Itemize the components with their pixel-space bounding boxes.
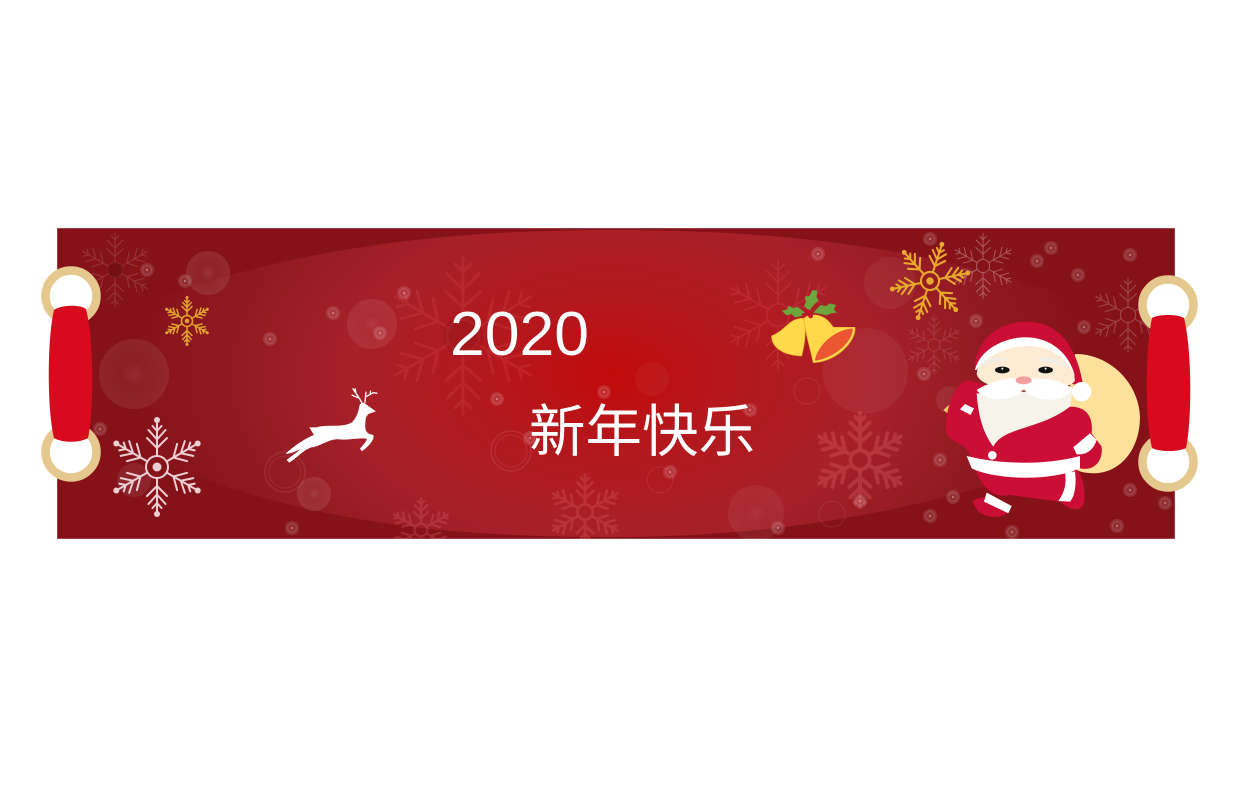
santa trim xyxy=(960,404,1097,513)
santa sack strap xyxy=(943,404,950,414)
santa hat xyxy=(975,322,1083,387)
banner background xyxy=(57,228,1175,561)
snowflake: white lower left xyxy=(109,417,205,517)
right red roll xyxy=(1147,315,1190,451)
icon: santa claus with sack xyxy=(943,322,1140,517)
santa face xyxy=(977,342,1075,390)
bokeh circles xyxy=(93,232,1172,541)
right top ring xyxy=(1142,280,1194,330)
title: 新年快乐: 新年快乐 xyxy=(529,400,755,463)
santa hat band xyxy=(975,337,1075,377)
title: 2020: 2020 xyxy=(450,300,589,369)
left top ring xyxy=(46,270,96,322)
snowflake: gold upper right xyxy=(890,242,970,320)
banner illustration xyxy=(41,228,1198,539)
icon: leaping reindeer xyxy=(286,388,377,463)
left red roll xyxy=(49,306,92,442)
santa eyes xyxy=(995,367,1010,373)
santa left foot xyxy=(972,497,1012,517)
left bottom ring xyxy=(46,426,96,478)
right scroll handle xyxy=(1142,280,1194,488)
santa moustache xyxy=(977,378,1073,400)
left scroll handle xyxy=(46,270,96,478)
icon: christmas bells xyxy=(772,290,855,363)
santa eyebrows xyxy=(979,358,1068,368)
santa nose xyxy=(1016,376,1032,384)
faint background snowflakes xyxy=(79,233,1164,561)
snowflake: gold upper left xyxy=(163,296,211,346)
santa body xyxy=(946,380,1102,509)
central light lens xyxy=(202,230,1013,537)
right bottom ring xyxy=(1142,436,1194,488)
santa sack xyxy=(1070,354,1140,474)
santa beard xyxy=(977,390,1073,447)
santa hat pompom xyxy=(1072,382,1091,401)
